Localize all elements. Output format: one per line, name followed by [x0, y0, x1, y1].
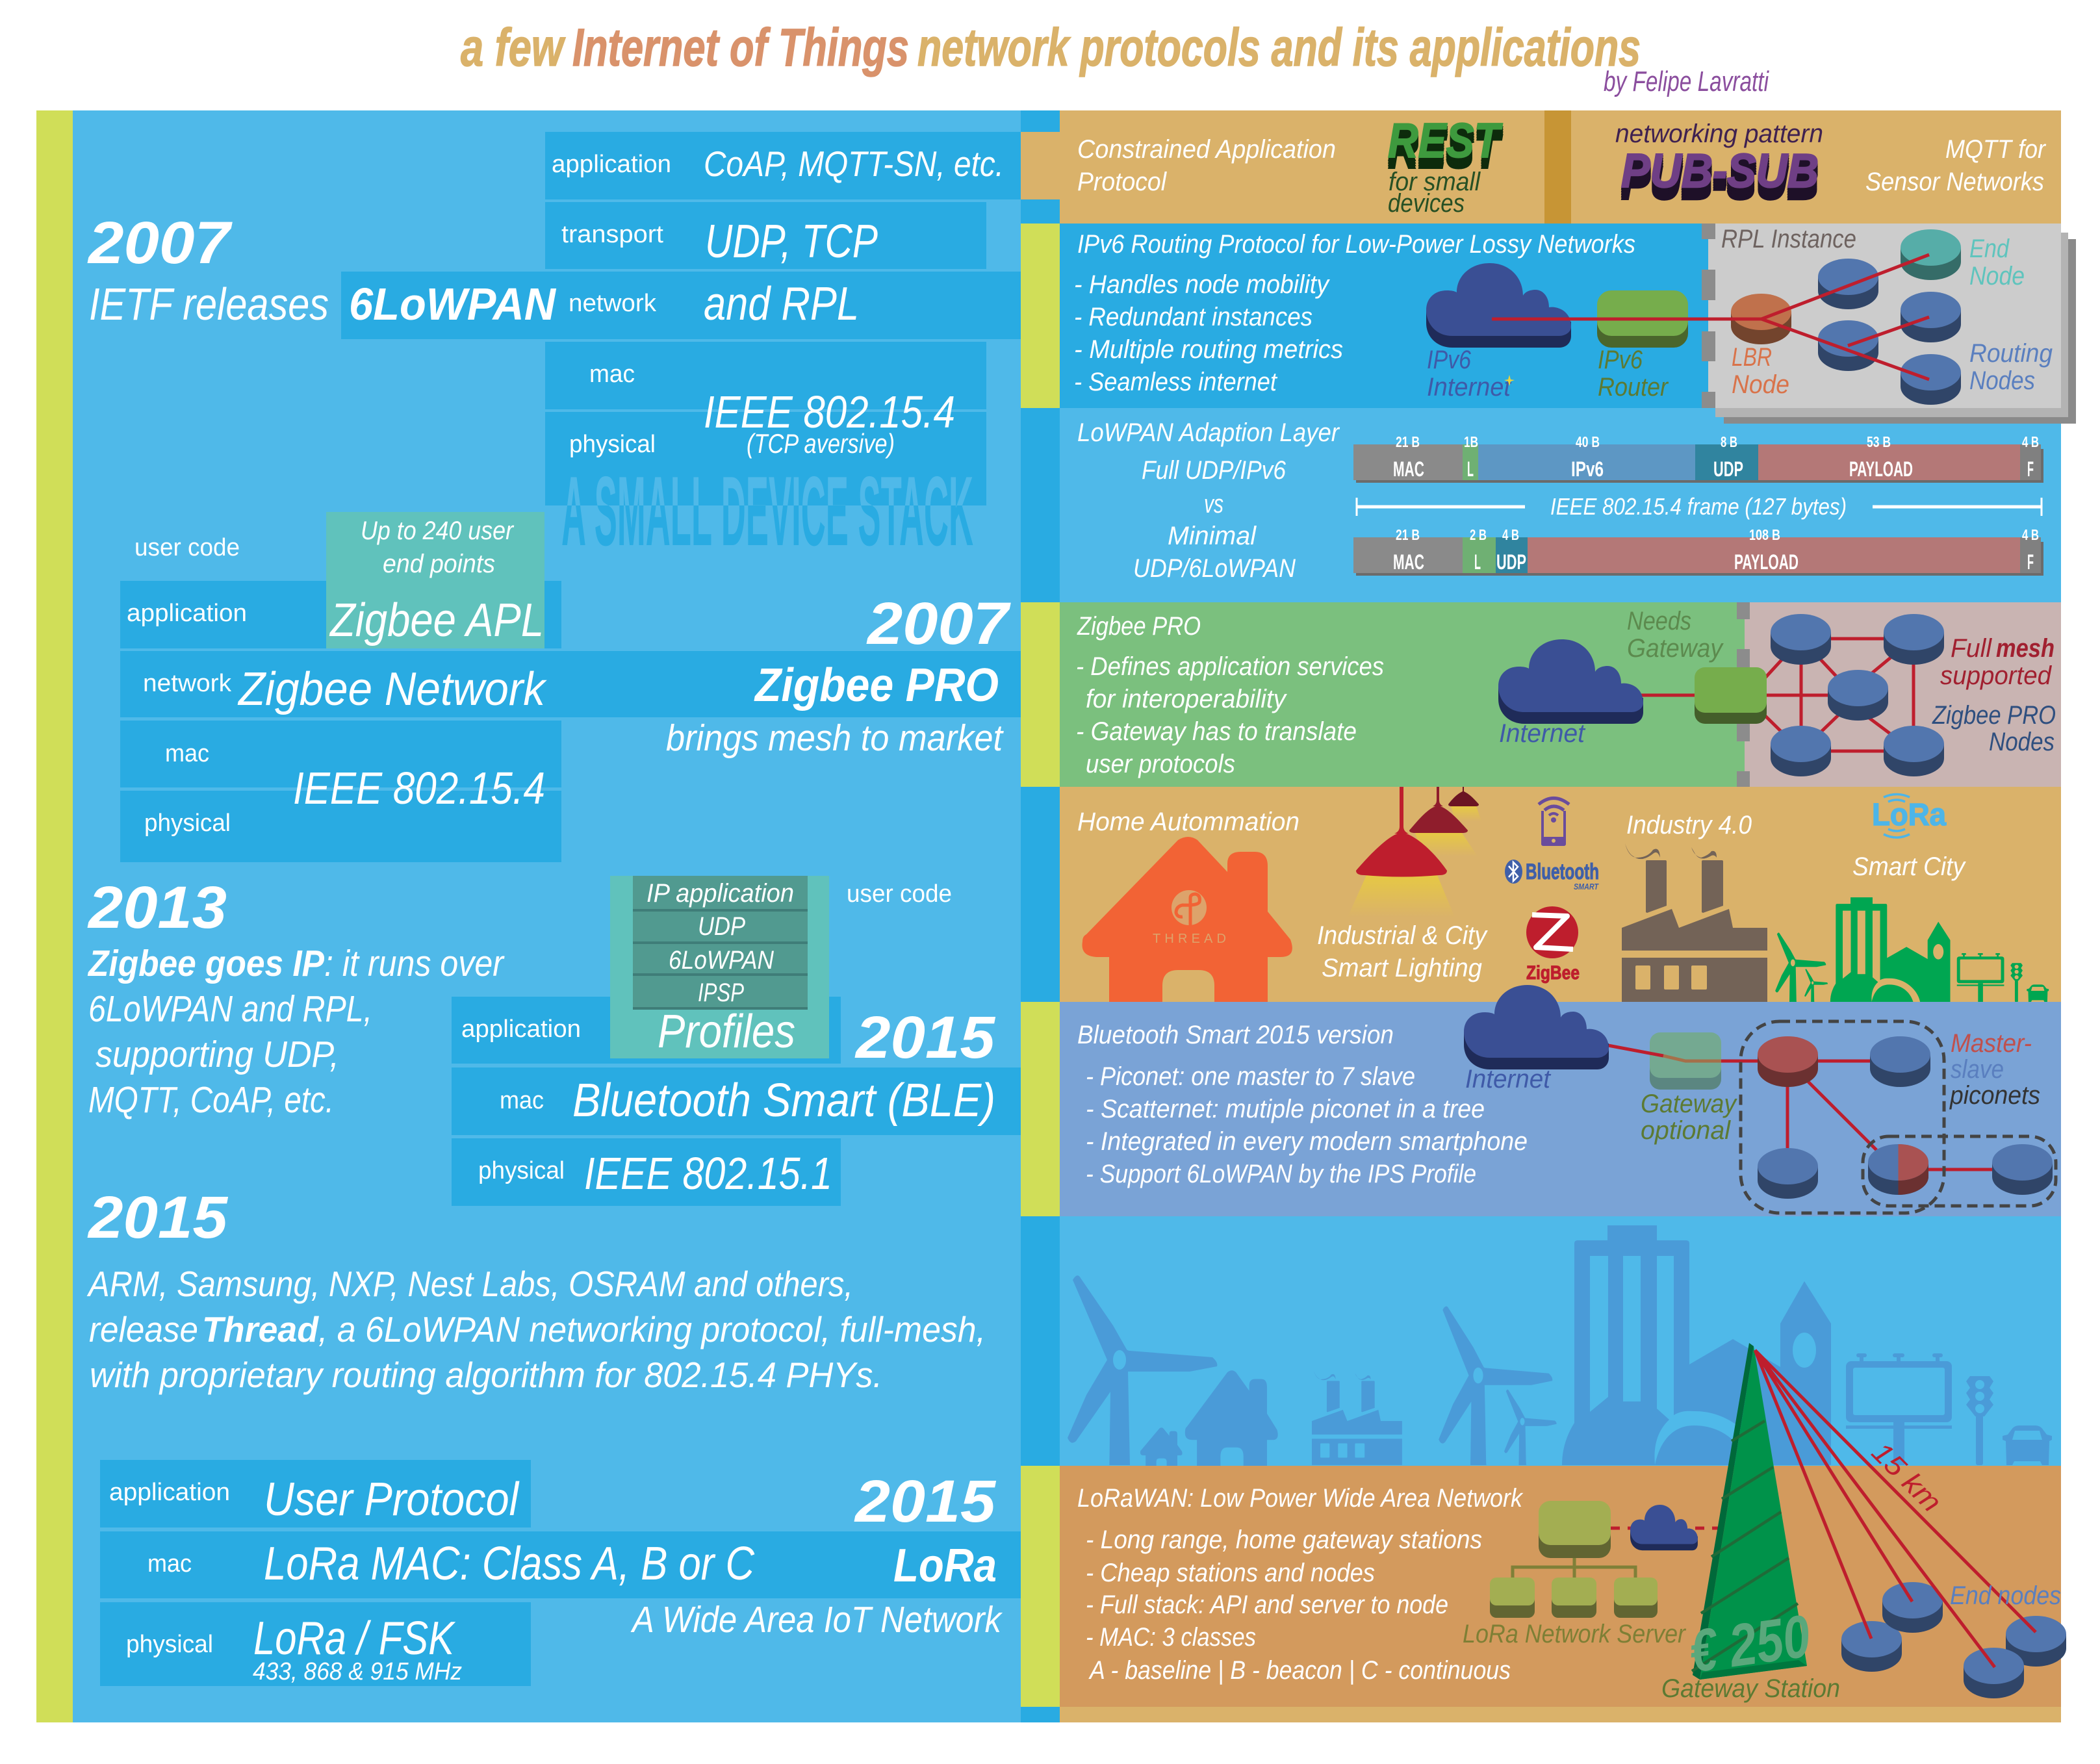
- lighting label: [1317, 921, 1489, 982]
- year heading: 2015: [854, 1004, 996, 1071]
- range label: 15 km: [1865, 1436, 1948, 1518]
- description: ARM, Samsung, NXP, Nest Labs, OSRAM and others,: [86, 1264, 853, 1304]
- node labels: IPv6: [1427, 346, 1472, 374]
- IP profile stack labels: IPSP: [698, 978, 744, 1007]
- IP profile stack labels: [647, 879, 795, 1058]
- description: Zigbee goes IP: [87, 943, 325, 984]
- panel: Bluetooth Smart: [1060, 985, 2061, 1216]
- layer labels: user code: [847, 880, 952, 908]
- feature list: [1086, 1062, 1528, 1188]
- feature list: A - baseline | B - beacon | C - continuous: [1088, 1656, 1511, 1685]
- node labels: Internet: [1427, 373, 1512, 402]
- panel: main timeline background: [73, 110, 1021, 1722]
- REST note: [1388, 168, 1481, 218]
- LoRa name: LoRa: [893, 1540, 997, 1592]
- comparison labels: Minimal: [1168, 522, 1257, 550]
- layer labels: application: [127, 600, 247, 627]
- icon: Bluetooth logo: Bluetooth: [1526, 860, 1599, 884]
- center strip: [1021, 110, 1060, 1722]
- layer labels: physical: [126, 1631, 213, 1658]
- link lines: [1608, 1045, 1992, 1170]
- layer protocols: [237, 594, 548, 813]
- PUB-SUB logo: PUB-SUB: [1621, 157, 1819, 210]
- frame size ruler: [1357, 493, 2042, 520]
- frame: full UDP/IPv6: 40 B: [1576, 433, 1600, 450]
- comparison labels: UDP/6LoWPAN: [1133, 554, 1296, 583]
- feature list: user protocols: [1086, 750, 1235, 778]
- layer protocols: Zigbee APL: [329, 594, 544, 646]
- RPL instance box: [1702, 224, 2076, 424]
- labels: Master-: [1951, 1029, 2032, 1058]
- labels: piconets: [1949, 1081, 2040, 1110]
- node labels: Router: [1598, 373, 1669, 402]
- frame: minimal UDP/6LoWPAN: L: [1474, 550, 1481, 574]
- frame: full UDP/IPv6: PAYLOAD: [1849, 457, 1913, 481]
- PUB-SUB logo: PUB-SUB: [1621, 155, 1819, 207]
- server label: LoRa Network Server: [1463, 1620, 1686, 1648]
- year heading: 2015: [854, 1468, 997, 1535]
- layer labels: [109, 1479, 230, 1658]
- layer labels: mac: [147, 1550, 192, 1578]
- labels: Gateway: [1641, 1090, 1738, 1118]
- frame: minimal UDP/6LoWPAN: PAYLOAD: [1734, 550, 1799, 574]
- text: A SMALL DEVICE STACK: [561, 456, 973, 567]
- server tree lines: [1513, 1558, 1635, 1578]
- lighting label: Industrial & City: [1317, 921, 1489, 950]
- feature list: [1076, 652, 1384, 778]
- CoAP name: Constrained Application: [1077, 135, 1336, 164]
- CoAP name: [1077, 135, 1336, 196]
- feature list: [1086, 1526, 1511, 1685]
- feature list: - Integrated in every modern smartphone: [1086, 1127, 1528, 1156]
- frame: full UDP/IPv6: 53 B: [1867, 433, 1891, 450]
- tagline: brings mesh to market: [666, 717, 1004, 759]
- description: , a 6LoWPAN networking protocol, full-mesh,: [318, 1309, 986, 1349]
- MQTT name: [1865, 135, 2047, 196]
- networking pattern: networking pattern: [1615, 120, 1823, 148]
- labels: [1499, 607, 2056, 756]
- heading: LoRaWAN: Low Power Wide Area Network: [1077, 1484, 1524, 1513]
- panel: Thread 2015: [86, 1184, 986, 1395]
- labels: Nodes: [1989, 728, 2055, 756]
- REST logo: REST: [1388, 113, 1503, 168]
- heading: LoWPAN Adaption Layer: [1077, 418, 1340, 447]
- layer labels: [127, 534, 247, 837]
- MQTT name: MQTT for: [1945, 135, 2047, 164]
- feature list: - Scatternet: mutiple piconet in a tree: [1086, 1095, 1485, 1123]
- feature list: [1074, 270, 1343, 396]
- frame: full UDP/IPv6: 1B: [1464, 433, 1478, 450]
- description: MQTT, CoAP, etc.: [88, 1079, 334, 1121]
- heading: Zigbee PRO: [1077, 612, 1201, 641]
- user end points note: end points: [383, 550, 495, 578]
- labels: supported: [1940, 661, 2053, 690]
- feature list: - Support 6LoWPAN by the IPS Profile: [1086, 1160, 1476, 1188]
- stack layers: [100, 1460, 1021, 1686]
- node labels: Routing: [1969, 339, 2053, 368]
- layer labels: physical: [478, 1157, 565, 1184]
- feature list: - Long range, home gateway stations: [1086, 1526, 1482, 1554]
- node labels: LBR: [1732, 343, 1772, 372]
- icon: router: [1597, 290, 1688, 348]
- icon: network server: [1490, 1501, 1658, 1618]
- node labels: RPL Instance: [1721, 225, 1856, 253]
- stack layers: [452, 876, 1021, 1206]
- feature list: - Seamless internet: [1074, 368, 1278, 396]
- layer labels: network: [143, 670, 232, 697]
- frame: full UDP/IPv6: 8 B: [1721, 433, 1737, 450]
- description: [87, 943, 505, 1121]
- icon: lamps: [1348, 787, 1481, 917]
- industry label: Industry 4.0: [1626, 811, 1752, 839]
- frame: full UDP/IPv6: L: [1467, 457, 1474, 481]
- frame: full UDP/IPv6: F: [2027, 457, 2034, 481]
- layer protocols: and RPL: [704, 278, 859, 330]
- feature list: for interoperability: [1086, 685, 1288, 713]
- node labels: [1427, 225, 2053, 402]
- panel: applications: [1060, 787, 2061, 1007]
- IP profile stack labels: UDP: [698, 912, 745, 941]
- IP profile stack labels: Profiles: [658, 1006, 795, 1058]
- feature list: - Gateway has to translate: [1076, 717, 1357, 746]
- panel: CoAP and MQTT: [1021, 110, 2061, 224]
- layer labels: application: [461, 1016, 581, 1043]
- frame: minimal UDP/6LoWPAN: 108 B: [1749, 526, 1780, 543]
- icon: cloud: [1464, 985, 1609, 1069]
- labels: Zigbee PRO: [1932, 701, 2056, 730]
- frame: full UDP/IPv6: 21 B: [1396, 433, 1420, 450]
- title: Internet of Things: [572, 18, 909, 77]
- panel: LoWPAN background: [1060, 408, 2061, 602]
- IP profile stack labels: IP application: [647, 879, 794, 908]
- layer protocols: (TCP aversive): [747, 428, 895, 459]
- radio links: [1755, 1350, 2036, 1667]
- frame: minimal UDP/6LoWPAN: [1353, 526, 2043, 576]
- icon: cloud: [1426, 263, 1571, 348]
- left green bar: [36, 110, 73, 1722]
- panel: 6LoWPAN stack 2007: [87, 132, 1021, 567]
- icon: Bluetooth logo: SMART: [1574, 882, 1599, 891]
- description: Thread: [202, 1309, 319, 1349]
- dashed uplink: [1611, 1527, 1742, 1529]
- frame: minimal UDP/6LoWPAN: 21 B: [1396, 526, 1420, 543]
- user end points note: Up to 240 user: [361, 517, 514, 545]
- frame: minimal UDP/6LoWPAN: 4 B: [2022, 526, 2039, 543]
- routing lines: [1492, 255, 1929, 379]
- description: 6LoWPAN and RPL,: [88, 988, 372, 1030]
- panel: Zigbee IP 2013: [87, 875, 505, 1121]
- layer labels: mac: [500, 1087, 544, 1114]
- icon: end nodes: [1841, 1582, 2066, 1698]
- frame: minimal UDP/6LoWPAN: MAC: [1393, 550, 1424, 574]
- layer protocols: LoRa / FSK: [253, 1613, 455, 1665]
- layer labels: application: [552, 151, 671, 178]
- layer labels: mac: [165, 740, 209, 767]
- feature list: - Defines application services: [1076, 652, 1384, 681]
- comparison labels: [1133, 456, 1296, 583]
- REST logo: REST: [1388, 119, 1503, 173]
- node labels: IPv6: [1598, 346, 1643, 374]
- CoAP name: Protocol: [1077, 168, 1167, 196]
- icon: RPL nodes: [1731, 229, 1961, 405]
- labels: End nodes: [1950, 1581, 2061, 1610]
- release text: 6LoWPAN: [349, 279, 556, 329]
- panel: Bluetooth Smart stack 2015: [452, 876, 1021, 1206]
- REST note: devices: [1388, 189, 1465, 218]
- frame: minimal UDP/6LoWPAN: 2 B: [1470, 526, 1487, 543]
- frame: full UDP/IPv6: 4 B: [2022, 433, 2039, 450]
- layer protocols: 433, 868 & 915 MHz: [253, 1658, 462, 1685]
- node labels: Node: [1969, 262, 2025, 290]
- icon: phone: [1539, 798, 1569, 846]
- frame: minimal UDP/6LoWPAN: F: [2027, 550, 2034, 574]
- labels: [1661, 1581, 2061, 1703]
- frame: full UDP/IPv6: MAC: [1393, 457, 1424, 481]
- frame: full UDP/IPv6: IPv6: [1571, 457, 1604, 481]
- panel: LoRaWAN: [1060, 1343, 2066, 1722]
- illustration: green city skyline: [1775, 897, 2049, 1007]
- release text: [89, 279, 556, 329]
- layer protocols: CoAP, MQTT-SN, etc.: [704, 144, 1004, 184]
- icon: house: THREAD: [1153, 932, 1226, 946]
- heading: home automation: Home Autommation: [1077, 808, 1300, 836]
- REST logo: REST: [1388, 121, 1503, 176]
- feature list: - Cheap stations and nodes: [1086, 1559, 1375, 1587]
- layer protocols: IEEE 802.15.4: [293, 763, 545, 813]
- smart city label: Smart City: [1852, 852, 1967, 881]
- heading: IPv6 Routing Protocol for Low-Power Lossy Networks: [1077, 230, 1635, 259]
- year heading: 2007: [866, 591, 1011, 657]
- year heading: 2015: [87, 1184, 229, 1251]
- labels: Internet: [1465, 1065, 1552, 1093]
- icon: gateway: [1695, 667, 1767, 724]
- panel: LoWPAN adaption layer: [1077, 418, 2043, 583]
- PUB-SUB logo: PUB-SUB: [1621, 145, 1819, 198]
- panel: Zigbee PRO: [1060, 602, 2061, 787]
- stack layers: [120, 512, 1021, 862]
- icon: Bluetooth logo: [1505, 860, 1599, 891]
- labels: slave: [1951, 1055, 2004, 1084]
- labels: Gateway: [1627, 634, 1724, 663]
- layer labels: application: [109, 1479, 230, 1506]
- node labels: Nodes: [1969, 366, 2035, 395]
- layer protocols: UDP, TCP: [705, 216, 878, 268]
- layer labels: [461, 880, 952, 1184]
- MQTT name: Sensor Networks: [1865, 168, 2044, 196]
- release text: IETF releases: [89, 279, 329, 329]
- description: [86, 1264, 986, 1395]
- Zigbee PRO name: Zigbee PRO: [754, 659, 999, 711]
- layer labels: mac: [589, 361, 635, 388]
- panel: RPL: [1060, 224, 2076, 424]
- layer protocols: LoRa MAC: Class A, B or C: [264, 1538, 755, 1590]
- labels: Needs: [1627, 607, 1691, 635]
- frame size ruler: IEEE 802.15.4 frame (127 bytes): [1550, 493, 1847, 520]
- labels: Full: [1951, 634, 1992, 663]
- description: with proprietary routing algorithm for 802.15.4 PHYs.: [90, 1355, 882, 1395]
- layer protocols: User Protocol: [264, 1474, 520, 1526]
- icon: gateway tower: [1692, 1343, 1807, 1680]
- layer protocols: [704, 144, 1004, 459]
- labels: optional: [1641, 1116, 1731, 1145]
- labels: mesh: [1996, 634, 2055, 663]
- icon: cloud: [1630, 1505, 1698, 1550]
- frame: minimal UDP/6LoWPAN: UDP: [1496, 550, 1526, 574]
- comparison labels: Full UDP/IPv6: [1142, 456, 1287, 485]
- icon: cloud: [1498, 639, 1643, 724]
- byline: by Felipe Lavratti: [1604, 66, 1769, 97]
- labels: [1465, 1029, 2040, 1145]
- feature list: - Multiple routing metrics: [1074, 335, 1343, 364]
- price on tower: € 250: [1685, 1603, 1814, 1685]
- layer labels: user code: [134, 534, 240, 561]
- frame: minimal UDP/6LoWPAN: 4 B: [1502, 526, 1519, 543]
- piconet outlines: [1741, 1021, 2056, 1213]
- layer protocols: [572, 1075, 995, 1199]
- labels: Gateway Station: [1661, 1674, 1840, 1703]
- mesh lines: [1624, 639, 1914, 751]
- user end points note: [361, 517, 514, 578]
- year heading: 2007: [87, 210, 233, 276]
- layer protocols: [253, 1474, 755, 1685]
- layer protocols: Zigbee Network: [237, 663, 548, 715]
- description: : it runs over: [324, 943, 505, 984]
- feature list: - MAC: 3 classes: [1086, 1623, 1256, 1652]
- labels: Internet: [1499, 719, 1586, 748]
- REST logo: REST: [1388, 124, 1503, 179]
- comparison labels: vs: [1204, 490, 1223, 518]
- layer labels: transport: [561, 221, 663, 248]
- layer labels: [552, 151, 671, 458]
- layer labels: network: [569, 290, 657, 317]
- PUB-SUB logo: PUB-SUB: [1621, 149, 1819, 202]
- panel: LoRa stack 2015: [100, 1460, 1021, 1686]
- icon: gateway: [1650, 1032, 1721, 1090]
- node labels: End: [1969, 235, 2010, 263]
- icon: house: [1082, 837, 1292, 1002]
- layer protocols: IEEE 802.15.1: [584, 1148, 832, 1199]
- title: [461, 18, 1641, 77]
- tagline: A Wide Area IoT Network: [630, 1599, 1003, 1641]
- feature list: - Redundant instances: [1074, 303, 1312, 331]
- illustration: blue city skyline: [1068, 1225, 2052, 1483]
- layer protocols: IEEE 802.15.4: [704, 387, 955, 437]
- panel: city skyline band: [1060, 1216, 2061, 1483]
- lighting label: Smart Lighting: [1322, 954, 1482, 982]
- feature list: - Piconet: one master to 7 slave: [1086, 1062, 1415, 1091]
- REST note: for small: [1389, 168, 1481, 196]
- stack layers: [341, 132, 1021, 505]
- IP profile stack labels: 6LoWPAN: [669, 946, 774, 975]
- layer labels: physical: [569, 431, 656, 458]
- PUB-SUB logo: PUB-SUB: [1621, 152, 1819, 205]
- icon: factory: [1622, 843, 1767, 1002]
- icon: LoRa logo: LoRa: [1872, 798, 1946, 832]
- icon: piconet nodes: [1758, 1036, 2053, 1199]
- REST logo: REST: [1388, 116, 1503, 171]
- description: supporting UDP,: [96, 1034, 339, 1075]
- node labels: Node: [1732, 370, 1789, 399]
- layer labels: physical: [144, 810, 231, 837]
- feature list: - Full stack: API and server to node: [1086, 1591, 1448, 1619]
- description: release: [89, 1309, 198, 1349]
- panel: Zigbee stack 2007: [120, 512, 1021, 862]
- icon: ZigBee logo: [1526, 906, 1580, 984]
- title: a few: [461, 18, 566, 77]
- layer protocols: Bluetooth Smart (BLE): [572, 1075, 995, 1127]
- feature list: - Handles node mobility: [1074, 270, 1331, 299]
- heading: Bluetooth Smart 2015 version: [1077, 1021, 1394, 1049]
- frame: full UDP/IPv6: [1353, 433, 2043, 483]
- frame: full UDP/IPv6: UDP: [1713, 457, 1743, 481]
- PUB-SUB logo: PUB-SUB: [1621, 147, 1819, 199]
- year heading: 2013: [87, 875, 227, 941]
- icon: ZigBee logo: ZigBee: [1526, 962, 1580, 984]
- icon: mesh nodes: [1771, 614, 1944, 776]
- title: network protocols and its applications: [917, 18, 1641, 77]
